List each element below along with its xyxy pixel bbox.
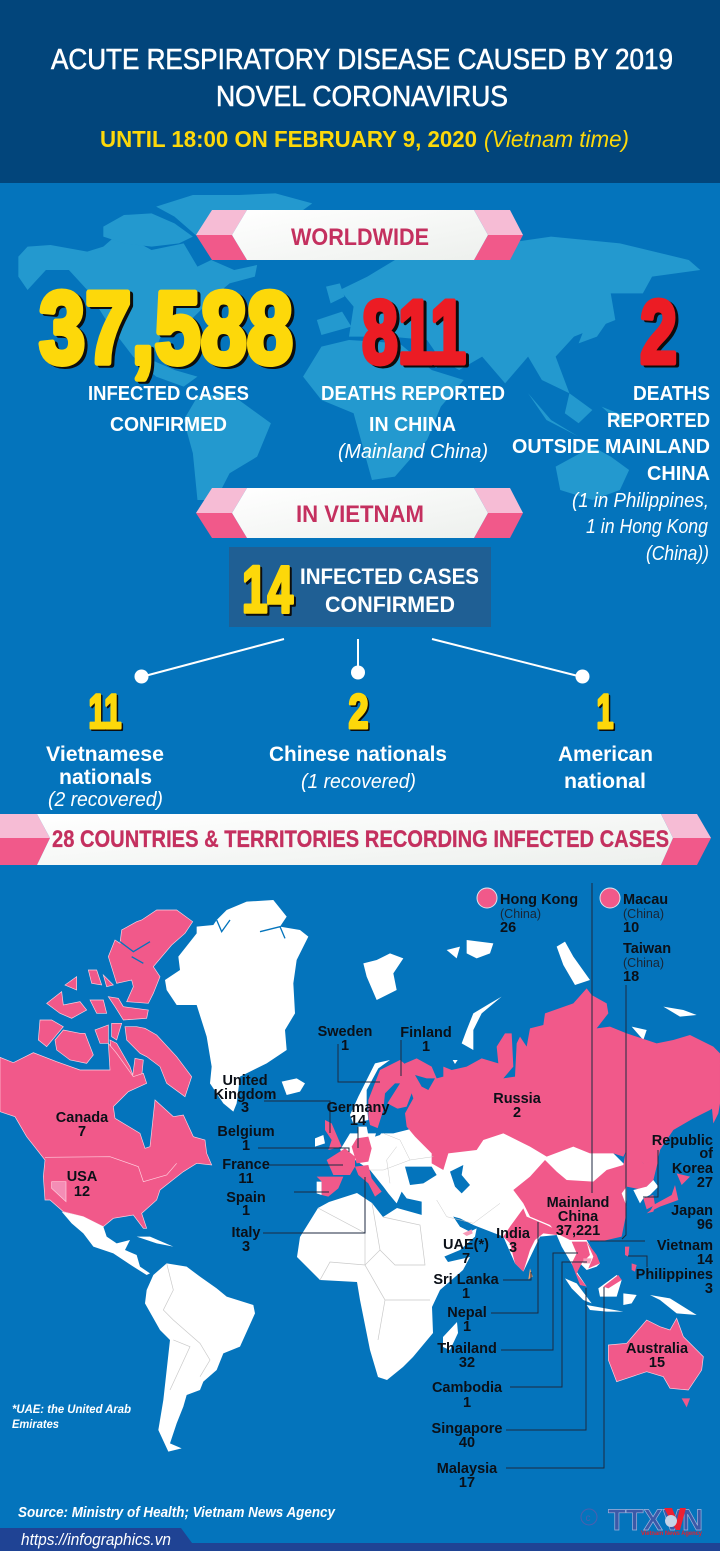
world map: Africa (297, 1193, 470, 1380)
stat: deaths outside mainland China: DEATHS (633, 383, 710, 405)
stat: deaths outside mainland China: 1 in Hong Kong (586, 516, 708, 538)
country labels: 3 (509, 1240, 517, 1256)
country labels: United (222, 1073, 268, 1089)
Nevada (52, 1182, 66, 1202)
country labels: 1 (341, 1038, 349, 1054)
stat: deaths in China: DEATHS REPORTED (321, 383, 505, 405)
stat: Chinese nationals: (1 recovered) (301, 771, 416, 793)
banner: worldwide: WORLDWIDE (291, 224, 429, 251)
South Korea (643, 1195, 655, 1209)
title (51, 44, 673, 113)
world map: west (0, 900, 308, 1452)
country labels: 15 (649, 1355, 665, 1371)
country labels: Spain (226, 1190, 266, 1206)
leader lines (258, 883, 658, 1468)
title: ACUTE RESPIRATORY DISEASE CAUSED BY 2019 (51, 44, 673, 76)
country labels: Canada (56, 1110, 109, 1126)
country labels: 3 (242, 1239, 250, 1255)
stat: infected cases worldwide: CONFIRMED (110, 414, 227, 436)
logo: TTXVN: Vietnam News Agency (641, 1530, 702, 1537)
logo: TTXVN: c (586, 1513, 590, 1524)
footnote: Emirates (12, 1417, 59, 1431)
country labels: 3 (241, 1100, 249, 1116)
stat: Chinese nationals: Chinese nationals (269, 743, 447, 766)
UAE (463, 1229, 473, 1236)
country labels: Hong Kong (500, 892, 578, 908)
Cambodia (583, 1258, 592, 1263)
stat: deaths outside mainland China (512, 283, 710, 565)
country labels: 3 (705, 1281, 713, 1297)
country labels: Finland (400, 1025, 452, 1041)
stat: deaths outside mainland China: 2 (640, 283, 677, 383)
country labels: Singapore (432, 1421, 502, 1437)
stat: American national: 1 (596, 686, 614, 739)
stat: deaths outside mainland China: CHINA (647, 463, 710, 485)
Vietnam total box: CONFIRMED (325, 592, 455, 617)
country labels: Italy (231, 1225, 261, 1241)
China (513, 1147, 658, 1242)
country labels: USA (67, 1169, 98, 1185)
world map: Asia base (340, 1117, 703, 1407)
footnote (12, 1402, 131, 1431)
logo: TTXVN: TTXVN (608, 1504, 703, 1537)
India (503, 1208, 560, 1272)
country labels: Germany (327, 1100, 389, 1116)
stat: American national: American (558, 743, 653, 766)
stat: deaths outside mainland China: OUTSIDE MAINLAND (512, 436, 710, 458)
country labels: 37,221 (556, 1223, 600, 1239)
Vietnam total box: 14 (244, 554, 295, 628)
Norway, Portugal, Ireland (315, 1060, 390, 1195)
stat: infected cases worldwide (39, 271, 296, 436)
world map: Russia and China (363, 940, 720, 1242)
Vietnam total box: INFECTED CASES (300, 564, 479, 589)
country labels: 11 (238, 1171, 254, 1187)
country labels: 14 (697, 1252, 713, 1268)
North Korea (633, 1180, 658, 1203)
stat: Vietnamese nationals: Vietnamese (46, 743, 164, 766)
stat: American national: national (564, 770, 646, 793)
country labels: 1 (242, 1203, 250, 1219)
banner: in Vietnam (196, 488, 523, 538)
header band (0, 0, 720, 183)
country labels: 1 (463, 1319, 471, 1335)
country labels: Sweden (318, 1024, 372, 1040)
country labels: 1 (242, 1138, 250, 1154)
date subtitle: (Vietnam time) (484, 126, 629, 152)
Canada and USA (0, 910, 212, 1228)
stat: deaths outside mainland China: 2 (643, 285, 680, 385)
banner: worldwide (196, 210, 523, 260)
country labels: 2 (513, 1105, 521, 1121)
world map: Europe (315, 1060, 500, 1223)
source: Source: Ministry of Health; Vietnam News Agency (18, 1504, 336, 1521)
country labels: (China) (500, 907, 541, 921)
stat: infected cases worldwide: 37,588 (42, 273, 296, 387)
connector lines (134, 639, 590, 684)
country labels: (China) (623, 956, 664, 970)
footnote: *UAE: the United Arab (12, 1402, 131, 1416)
White Sea (415, 1075, 435, 1090)
country labels: Malaysia (437, 1461, 498, 1477)
stat: infected cases worldwide: 37,588 (39, 271, 293, 385)
stat: American national: 1 (598, 688, 615, 740)
country labels: 7 (462, 1251, 470, 1267)
country labels: Macau (623, 892, 668, 908)
background world map (18, 193, 700, 500)
country labels: Korea (672, 1161, 714, 1177)
country labels: 1 (422, 1039, 430, 1055)
Thailand, Malaysia, Vietnam, Philippines (572, 1242, 637, 1288)
country labels: Russia (493, 1091, 542, 1107)
country labels: Thailand (437, 1341, 497, 1357)
stat: deaths outside mainland China: (China)) (646, 543, 709, 565)
country labels: 1 (463, 1395, 471, 1411)
footer bar: https://infographics.vn (21, 1530, 171, 1549)
country labels: (China) (623, 907, 664, 921)
country labels: Nepal (447, 1305, 487, 1321)
country labels: 96 (697, 1217, 713, 1233)
stat: Chinese nationals: 2 (348, 686, 368, 739)
UK, France, Spain, Germany, Italy (317, 1120, 382, 1197)
stat: Vietnamese nationals (46, 686, 164, 811)
country labels: 40 (459, 1435, 475, 1451)
country labels: 26 (500, 920, 516, 936)
stat: Vietnamese nationals: nationals (59, 766, 152, 789)
country labels: 27 (697, 1175, 713, 1191)
Scandinavia (368, 1060, 412, 1128)
country labels: 10 (623, 920, 639, 936)
Black Sea, Caspian, Persian Gulf (405, 1165, 473, 1232)
country labels: China (558, 1209, 599, 1225)
country labels: Taiwan (623, 941, 671, 957)
country labels: 1 (462, 1286, 470, 1302)
Russia (405, 988, 720, 1180)
Central and South America (62, 1212, 255, 1452)
Hong Kong and Macau markers (477, 888, 620, 908)
footer bar (0, 1528, 720, 1551)
country labels: Vietnam (657, 1238, 713, 1254)
stat: deaths in China (321, 283, 505, 463)
country labels: 32 (459, 1355, 475, 1371)
country labels: Philippines (636, 1267, 713, 1283)
banner: 28 countries (0, 814, 711, 865)
country labels (56, 892, 714, 1491)
stat: Vietnamese nationals: 11 (90, 688, 123, 740)
stat: deaths in China: 811 (362, 283, 466, 383)
country labels: Sri Lanka (433, 1272, 500, 1288)
stat: deaths outside mainland China: REPORTED (607, 410, 710, 432)
country labels: 12 (74, 1184, 90, 1200)
country labels: France (222, 1157, 270, 1173)
country labels: of (699, 1146, 713, 1162)
stat: American national (558, 686, 653, 793)
stat: Vietnamese nationals: 11 (88, 686, 122, 739)
banner: in Vietnam: IN VIETNAM (296, 501, 424, 528)
Arctic islands (363, 940, 697, 1064)
Southeast Asia white (565, 1275, 697, 1315)
stat: deaths in China: 811 (365, 285, 469, 385)
country labels: India (496, 1226, 531, 1242)
country labels: 17 (459, 1475, 475, 1491)
stat: Vietnamese nationals: (2 recovered) (48, 789, 163, 811)
title: NOVEL CORONAVIRUS (216, 81, 508, 113)
Australia (608, 1318, 703, 1390)
country labels: Australia (626, 1341, 689, 1357)
stat: Chinese nationals (269, 686, 447, 793)
stat: deaths outside mainland China: (1 in Philippines, (572, 490, 709, 512)
Sri Lanka (528, 1268, 533, 1279)
Vietnam total box: 14 (242, 552, 293, 626)
Greenland and Iceland (165, 900, 308, 1112)
country labels: 18 (623, 969, 639, 985)
country labels: 14 (350, 1113, 366, 1129)
country labels: 7 (78, 1124, 86, 1140)
stat: infected cases worldwide: INFECTED CASES (88, 383, 249, 405)
country labels: UAE(*) (443, 1237, 489, 1253)
country labels: Cambodia (432, 1380, 503, 1396)
Vietnam total box (229, 547, 491, 628)
country labels: Japan (671, 1203, 713, 1219)
stat: deaths in China: (Mainland China) (338, 441, 488, 463)
country labels: Belgium (217, 1124, 275, 1140)
Japan (647, 1103, 720, 1213)
country labels: Republic (652, 1133, 713, 1149)
stat: Chinese nationals: 2 (350, 688, 370, 740)
country labels: Mainland (547, 1195, 609, 1211)
date subtitle: UNTIL 18:00 ON FEBRUARY 9, 2020 (100, 126, 477, 152)
country labels: Kingdom (214, 1087, 276, 1103)
stat: deaths in China: IN CHINA (369, 414, 456, 436)
